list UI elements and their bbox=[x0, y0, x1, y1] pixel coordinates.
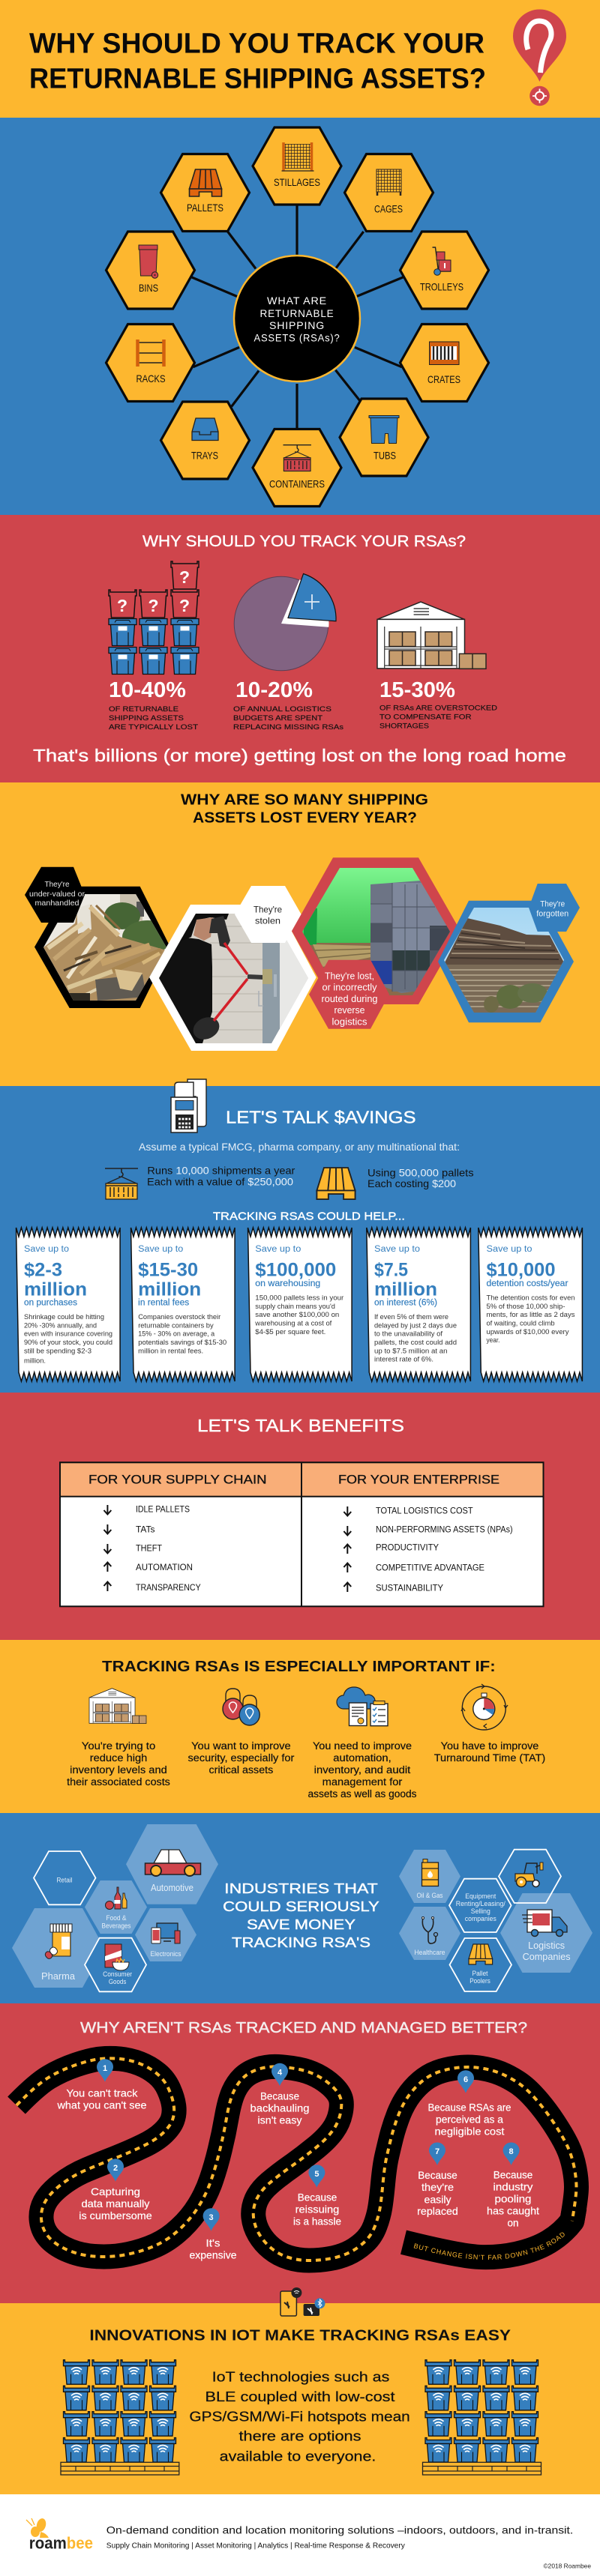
hex: consumer goods: Consumer bbox=[103, 1970, 132, 1979]
tag: stolen: stolen bbox=[255, 916, 280, 926]
card: purchases: 90% of your stock, you could bbox=[24, 1339, 112, 1347]
tag: forgotten: They're bbox=[540, 899, 565, 908]
reason 4: 4 bbox=[278, 2069, 283, 2078]
icon: phone and beacon bbox=[280, 2287, 326, 2316]
hex: equipment rental bbox=[449, 1879, 512, 1932]
card: purchases: 20% -30% annually, and bbox=[24, 1321, 97, 1330]
hub circle: ASSETS (RSAs)? bbox=[254, 333, 340, 343]
reason 6: negligible cost bbox=[435, 2126, 505, 2138]
enterprise list bbox=[376, 1506, 513, 1593]
hex: racks: RACKS bbox=[136, 372, 165, 384]
panel: why aren't RSAs tracked bbox=[0, 2003, 600, 2303]
text: inventory: You're trying to bbox=[82, 1740, 155, 1752]
icon: stacked bins with missing ones: ? bbox=[117, 596, 128, 615]
hex: crates: CRATES bbox=[428, 373, 460, 385]
stat: 10-40%: ARE TYPICALLY LOST bbox=[109, 723, 198, 732]
reason 3: expensive bbox=[189, 2248, 237, 2260]
card: rental fees: 15% - 30% on average, a bbox=[138, 1330, 215, 1339]
table bbox=[60, 1462, 543, 1606]
hex: logistics companies: Companies bbox=[523, 1951, 571, 1962]
text: automation: automation, bbox=[333, 1752, 392, 1764]
text: security: security, especially for bbox=[188, 1752, 295, 1764]
tag: stolen bbox=[235, 886, 302, 943]
center text bbox=[223, 1880, 380, 1950]
enterprise list: TOTAL LOGISTICS COST bbox=[376, 1506, 473, 1515]
heading: LET'S TALK BENEFITS bbox=[197, 1416, 404, 1435]
card: detention costs: 5% of those 10,000 ship- bbox=[486, 1303, 566, 1311]
icon: pallet of connected bins, right bbox=[423, 2360, 542, 2475]
supply chain list: TATs bbox=[136, 1526, 155, 1535]
stat: 10-40% bbox=[109, 678, 198, 732]
heading: WHY ARE SO MANY SHIPPING bbox=[181, 791, 428, 808]
hex: trays bbox=[160, 402, 249, 479]
header band bbox=[0, 0, 600, 118]
hub circle: RETURNABLE bbox=[260, 308, 334, 319]
card: detention costs: Save up to bbox=[486, 1245, 532, 1254]
stat: 10-20%: 10-20% bbox=[236, 678, 313, 702]
hex: pallets: PALLETS bbox=[187, 202, 224, 214]
card: warehousing: $4-$5 per square feet. bbox=[255, 1328, 326, 1336]
reason 7: easily bbox=[424, 2193, 452, 2205]
hex: food and beverages: Beverages bbox=[102, 1922, 131, 1931]
stat: 10-20% bbox=[233, 678, 344, 732]
tag: under-valued bbox=[25, 867, 86, 923]
pie chart bbox=[234, 574, 336, 671]
reason 2: Capturing bbox=[91, 2186, 140, 2198]
reason 8: has caught bbox=[487, 2205, 539, 2217]
card: interest: to the unavailability of bbox=[374, 1330, 442, 1339]
text: automation: inventory, and audit bbox=[314, 1764, 411, 1776]
supply chain arrows bbox=[104, 1505, 111, 1591]
tag: under-valued: under-valued or bbox=[29, 890, 86, 899]
takeaway line: That's billions (or more) getting lost on the long road home bbox=[33, 746, 566, 765]
photo hexagon: broken pallets bbox=[25, 867, 173, 1008]
title bbox=[29, 28, 486, 94]
hex: tubs bbox=[340, 399, 428, 476]
reason 5: reissuing bbox=[296, 2204, 339, 2215]
card: warehousing: save another $100,000 on bbox=[255, 1311, 339, 1319]
hex: healthcare: Healthcare bbox=[414, 1949, 446, 1957]
body text: GPS/GSM/Wi-Fi hotspots mean bbox=[189, 2409, 410, 2425]
card: rental fees: potentials savings of $15-30 bbox=[138, 1339, 226, 1347]
stat: 15-30%: OF RSAs ARE OVERSTOCKED bbox=[380, 705, 497, 712]
reason 3: It's bbox=[206, 2236, 220, 2248]
hex: equipment rental: Equipment bbox=[465, 1892, 496, 1900]
stat: 15-30%: SHORTAGES bbox=[380, 723, 429, 730]
icon: payment terminal bbox=[171, 1079, 206, 1132]
supply chain list: TRANSPARENCY bbox=[136, 1584, 201, 1593]
hex: equipment rental: Selling bbox=[471, 1907, 490, 1915]
reason 6: Because RSAs are bbox=[428, 2102, 512, 2114]
card: interest: on interest (6%) bbox=[374, 1299, 437, 1308]
title: WHY SHOULD YOU TRACK YOUR bbox=[29, 28, 484, 60]
reason 7 bbox=[417, 2142, 458, 2217]
text: automation: You need to improve bbox=[313, 1740, 412, 1752]
hex: trolleys bbox=[400, 232, 489, 309]
icon: stacked bins with missing ones: ? bbox=[179, 596, 190, 615]
card: rental fees: million bbox=[138, 1279, 201, 1300]
supply chain list bbox=[136, 1505, 201, 1593]
reason 4: isn't easy bbox=[258, 2114, 302, 2126]
reason 8: 8 bbox=[509, 2147, 514, 2156]
panel: why are assets lost bbox=[0, 782, 600, 1086]
hex: trolleys: TROLLEYS bbox=[420, 281, 464, 293]
icon: pallet bbox=[316, 1168, 356, 1199]
hex: pallet poolers bbox=[450, 1938, 512, 1991]
card: warehousing: supply chain means you'd bbox=[255, 1303, 335, 1311]
hex: pallets bbox=[160, 154, 249, 231]
stat: 10-20%: BUDGETS ARE SPENT bbox=[233, 714, 322, 723]
icon: warehouse bbox=[89, 1689, 146, 1723]
enterprise list: COMPETITIVE ADVANTAGE bbox=[376, 1563, 484, 1572]
hex: cages: CAGES bbox=[374, 203, 403, 215]
hex: trays: TRAYS bbox=[191, 450, 218, 462]
reason 5 bbox=[293, 2165, 341, 2227]
hub circle: WHAT ARE bbox=[267, 295, 327, 307]
card: rental fees bbox=[130, 1228, 235, 1381]
reason 4: Because bbox=[260, 2090, 299, 2102]
text: security bbox=[188, 1740, 295, 1776]
enterprise arrows bbox=[344, 1506, 351, 1592]
card: detention costs: year. bbox=[486, 1336, 500, 1345]
text: turnaround: Turnaround Time (TAT) bbox=[434, 1752, 545, 1764]
card: interest: pallets, the cost could add bbox=[374, 1339, 457, 1347]
hex: consumer goods bbox=[85, 1938, 146, 1991]
reason 7: 7 bbox=[435, 2147, 440, 2156]
supply chain list: IDLE PALLETS bbox=[136, 1505, 190, 1514]
hex: oil and gas: Oil & Gas bbox=[417, 1892, 443, 1900]
card: interest: $7.5 bbox=[374, 1260, 408, 1281]
hub circle bbox=[234, 256, 360, 381]
footer bbox=[0, 2494, 600, 2576]
icon: stopwatch bbox=[461, 1684, 508, 1730]
hex: equipment rental: Renting/Leasing/ bbox=[456, 1900, 506, 1907]
enterprise list: NON-PERFORMING ASSETS (NPAs) bbox=[376, 1526, 513, 1535]
heading: TRACKING RSAs IS ESPECIALLY IMPORTANT IF: bbox=[102, 1659, 496, 1675]
title: RETURNABLE SHIPPING ASSETS? bbox=[29, 63, 486, 94]
hex: tractor bbox=[499, 1850, 561, 1903]
text: turnaround bbox=[434, 1740, 545, 1764]
tag: lost or misrouted bbox=[309, 960, 389, 1029]
reason 8: pooling bbox=[495, 2193, 531, 2205]
card: purchases: even with insurance covering bbox=[24, 1330, 112, 1339]
tag: under-valued: They're bbox=[45, 880, 70, 889]
text: inventory bbox=[67, 1740, 170, 1788]
hex: bins bbox=[106, 232, 195, 309]
text: automation: management for bbox=[322, 1776, 403, 1788]
card: purchases: on purchases bbox=[24, 1299, 77, 1308]
icon: warehouse bbox=[377, 602, 486, 669]
reason 6: perceived as a bbox=[436, 2114, 503, 2126]
hex: pallet poolers: Pallet bbox=[472, 1970, 488, 1978]
reason 8 bbox=[487, 2142, 539, 2229]
assumption line: Assume a typical FMCG, pharma company, or any multinational that: bbox=[139, 1141, 460, 1153]
reason 3 bbox=[189, 2208, 237, 2260]
assumption: shipments bbox=[147, 1165, 296, 1187]
stat: 10-20%: REPLACING MISSING RSAs bbox=[233, 723, 344, 732]
logo: roambee: roambee bbox=[29, 2534, 93, 2553]
hex: containers bbox=[253, 429, 341, 507]
card: interest: If even 5% of them were bbox=[374, 1313, 448, 1321]
assumption: shipments: Runs 10,000 shipments a year bbox=[147, 1165, 296, 1177]
card: purchases bbox=[16, 1228, 120, 1381]
hex: retail: Retail bbox=[57, 1877, 72, 1884]
card: rental fees: Companies overstock their bbox=[138, 1313, 220, 1321]
card: detention costs: ments, for as little as 2 days bbox=[486, 1311, 575, 1319]
reason 2: is cumbersome bbox=[79, 2209, 152, 2221]
reason 2: data manually bbox=[81, 2198, 150, 2209]
photo hexagon: theft with bolt cutters bbox=[149, 886, 316, 1051]
card: purchases: Shrinkage could be hitting bbox=[24, 1313, 104, 1321]
card: warehousing: on warehousing bbox=[255, 1279, 320, 1288]
card: interest: delayed by just 2 days due bbox=[374, 1321, 457, 1330]
photo hexagon: stacked crates bbox=[292, 857, 460, 1029]
assumption: pallets: Each costing $200 bbox=[368, 1177, 456, 1189]
stat: 10-20%: OF ANNUAL LOGISTICS bbox=[233, 705, 332, 714]
reason 1: 1 bbox=[103, 2064, 107, 2073]
reason 6 bbox=[428, 2070, 512, 2138]
tag: lost or misrouted: They're lost, bbox=[325, 971, 374, 982]
hex: electronics: Electronics bbox=[150, 1950, 182, 1958]
hex: food and beverages bbox=[85, 1880, 147, 1934]
reason 3: 3 bbox=[209, 2213, 214, 2222]
card: warehousing: 150,000 pallets less in your bbox=[255, 1294, 344, 1303]
panel: let's talk savings bbox=[0, 1079, 600, 1393]
panel: innovations in IoT bbox=[0, 2287, 600, 2494]
hex: consumer goods: Goods bbox=[109, 1978, 127, 1986]
card: detention costs: The detention costs for even bbox=[486, 1294, 574, 1303]
hex: stillages: STILLAGES bbox=[274, 176, 320, 188]
stat: 15-30%: 15-30% bbox=[380, 678, 455, 702]
text: inventory: their associated costs bbox=[67, 1776, 170, 1788]
tag: lost or misrouted: logistics bbox=[332, 1016, 368, 1027]
card: warehousing: $100,000 bbox=[255, 1260, 336, 1281]
photo hexagon: forgotten pallets bbox=[438, 884, 580, 1022]
panel: let's talk benefits bbox=[0, 1393, 600, 1640]
heading bbox=[181, 791, 428, 827]
icon: stacked bins with missing ones: ? bbox=[148, 596, 159, 615]
card: detention costs: upwards of $10,000 every bbox=[486, 1328, 569, 1336]
reason 1: You can't track bbox=[66, 2087, 139, 2099]
stat: 15-30% bbox=[380, 678, 497, 730]
assumption: shipments: Each with a value of $250,000 bbox=[147, 1175, 293, 1187]
card: interest bbox=[367, 1228, 470, 1381]
body text: BLE coupled with low-cost bbox=[206, 2389, 394, 2404]
card: detention costs bbox=[478, 1228, 582, 1381]
card: interest: up to $7.5 million at an bbox=[374, 1347, 447, 1355]
card: interest: Save up to bbox=[374, 1245, 420, 1254]
reason 5: is a hassle bbox=[293, 2215, 341, 2227]
heading: LET'S TALK $AVINGS bbox=[226, 1108, 416, 1127]
heading: ASSETS LOST EVERY YEAR? bbox=[193, 810, 417, 827]
stat: 10-40%: SHIPPING ASSETS bbox=[109, 714, 184, 723]
card: warehousing: warehousing at a cost of bbox=[254, 1319, 332, 1328]
hex: bins: BINS bbox=[139, 282, 158, 294]
card: rental fees: $15-30 bbox=[138, 1260, 198, 1281]
enterprise list: SUSTAINABILITY bbox=[376, 1584, 443, 1593]
tag: forgotten bbox=[529, 884, 580, 932]
card: rental fees: in rental fees bbox=[138, 1299, 189, 1308]
card: rental fees: million in rental fees. bbox=[138, 1347, 203, 1355]
text: inventory: inventory levels and bbox=[70, 1764, 167, 1776]
panel: why should you track bbox=[0, 515, 600, 782]
text: automation bbox=[308, 1740, 417, 1800]
text: automation: assets as well as goods bbox=[308, 1788, 417, 1800]
reason 4 bbox=[250, 2063, 309, 2126]
reason 2: 2 bbox=[113, 2164, 118, 2173]
road caption: BUT CHANGE ISN'T FAR DOWN THE ROAD bbox=[414, 2232, 565, 2260]
column header: supply chain: FOR YOUR SUPPLY CHAIN bbox=[88, 1473, 267, 1486]
hex: pharma bbox=[12, 1908, 104, 1988]
reason 6: 6 bbox=[464, 2075, 468, 2084]
hex: pallet poolers: Poolers bbox=[470, 1977, 490, 1985]
copyright: ©2018 Roambee bbox=[543, 2563, 591, 2570]
winding road bbox=[16, 2058, 576, 2260]
hex: containers: CONTAINERS bbox=[269, 478, 325, 490]
services line: Supply Chain Monitoring | Asset Monitoring | Analytics | Real-time Response & Recovery bbox=[106, 2542, 405, 2550]
subheading: TRACKING RSAS COULD HELP... bbox=[213, 1210, 405, 1222]
card: interest: million bbox=[374, 1279, 437, 1300]
icon: stacked bins with missing ones bbox=[109, 561, 199, 675]
body text: there are options bbox=[238, 2428, 362, 2444]
reason 5: 5 bbox=[314, 2170, 319, 2179]
panel: especially important if bbox=[0, 1640, 600, 1813]
tag: lost or misrouted: routed during bbox=[321, 994, 378, 1004]
hex: equipment rental: companies bbox=[465, 1915, 496, 1922]
text: security: critical assets bbox=[209, 1764, 274, 1776]
card: purchases: million bbox=[24, 1279, 87, 1300]
card: purchases: Save up to bbox=[24, 1245, 69, 1254]
card: purchases: million. bbox=[24, 1357, 46, 1366]
panel: what are returnable shipping assets bbox=[0, 118, 600, 515]
heading: INNOVATIONS IN IOT MAKE TRACKING RSAs EASY bbox=[89, 2328, 512, 2344]
center text: COULD SERIOUSLY bbox=[223, 1898, 380, 1914]
stat: 15-30%: TO COMPENSATE FOR bbox=[380, 714, 472, 721]
icon: cloud with documents bbox=[337, 1687, 388, 1726]
reason 1 bbox=[56, 2059, 147, 2111]
hex: cages bbox=[345, 154, 434, 231]
hex: automotive bbox=[126, 1824, 218, 1904]
icon: stacked bins with missing ones: ? bbox=[179, 567, 190, 587]
card: warehousing bbox=[248, 1228, 352, 1381]
icon: location pin with question mark bbox=[513, 9, 566, 106]
card: detention costs: $10,000 bbox=[486, 1260, 555, 1281]
icon: pallet of connected bins, left bbox=[61, 2360, 179, 2475]
card: purchases: still be spending $2-3 bbox=[24, 1347, 92, 1355]
tag: forgotten: forgotten bbox=[536, 910, 568, 919]
reason 7: Because bbox=[418, 2169, 458, 2181]
stat: 10-40%: OF RETURNABLE bbox=[109, 705, 178, 714]
body text bbox=[189, 2368, 410, 2464]
hex: electronics bbox=[135, 1908, 196, 1961]
icon: location padlocks bbox=[223, 1689, 260, 1725]
card: rental fees: Save up to bbox=[138, 1245, 183, 1254]
heading: WHY SHOULD YOU TRACK YOUR RSAs? bbox=[142, 533, 466, 550]
body text: available to everyone. bbox=[220, 2448, 376, 2464]
hex: logistics companies: Logistics bbox=[528, 1940, 566, 1951]
reason 1: what you can't see bbox=[56, 2099, 147, 2111]
center text: TRACKING RSA'S bbox=[232, 1934, 370, 1950]
reason 5: Because bbox=[298, 2192, 337, 2204]
stat: 10-40%: 10-40% bbox=[109, 678, 186, 702]
enterprise list: PRODUCTIVITY bbox=[376, 1544, 439, 1553]
reason 7: replaced bbox=[417, 2205, 458, 2217]
logo: roambee bbox=[26, 2518, 93, 2553]
supply chain list: THEFT bbox=[136, 1544, 162, 1553]
hex: tubs: TUBS bbox=[374, 450, 396, 462]
reason 8: on bbox=[507, 2217, 519, 2229]
tagline: On-demand condition and location monitoring solutions –indoors, outdoors, and in-transit. bbox=[106, 2524, 573, 2536]
hex: stillages bbox=[253, 127, 341, 205]
panel: industries bbox=[0, 1813, 600, 2003]
card: detention costs: detention costs/year bbox=[486, 1279, 568, 1288]
icon: shipping container bbox=[105, 1168, 138, 1199]
hex: crates bbox=[400, 324, 489, 402]
text: security: You want to improve bbox=[191, 1740, 291, 1752]
card: interest: interest rate of 6%. bbox=[374, 1356, 434, 1364]
card: warehousing: Save up to bbox=[255, 1245, 301, 1254]
hex: automotive: Automotive bbox=[151, 1883, 194, 1893]
hex: retail bbox=[34, 1851, 96, 1904]
center text: INDUSTRIES THAT bbox=[224, 1880, 378, 1896]
reason 8: industry bbox=[494, 2180, 532, 2192]
tag: stolen: They're bbox=[254, 904, 282, 914]
reason 4: backhauling bbox=[250, 2102, 309, 2114]
card: rental fees: returnable containers by bbox=[138, 1321, 214, 1330]
column header: enterprise: FOR YOUR ENTERPRISE bbox=[338, 1473, 500, 1486]
hex: oil and gas bbox=[399, 1850, 460, 1903]
heading: WHY AREN'T RSAs TRACKED AND MANAGED BETTER? bbox=[80, 2020, 527, 2036]
card: detention costs: of waiting, could climb bbox=[486, 1319, 555, 1328]
hub circle: SHIPPING bbox=[269, 320, 325, 331]
card: purchases: $2-3 bbox=[24, 1260, 62, 1281]
reason 2 bbox=[79, 2159, 152, 2221]
hex: food and beverages: Food & bbox=[106, 1914, 127, 1922]
hex: logistics companies bbox=[500, 1893, 592, 1973]
reason 7: they're bbox=[422, 2181, 454, 2193]
tag: under-valued: manhandled bbox=[34, 899, 80, 908]
tag: lost or misrouted: reverse bbox=[334, 1005, 365, 1016]
supply chain list: AUTOMATION bbox=[136, 1563, 193, 1572]
hex: pharma: Pharma bbox=[41, 1970, 76, 1982]
text: turnaround: You have to improve bbox=[441, 1740, 538, 1752]
body text: IoT technologies such as bbox=[212, 2368, 389, 2384]
center text: SAVE MONEY bbox=[247, 1916, 356, 1932]
tag: lost or misrouted: or incorrectly bbox=[322, 982, 377, 992]
assumption: pallets: Using 500,000 pallets bbox=[368, 1166, 474, 1178]
text: inventory: reduce high bbox=[90, 1752, 147, 1764]
assumption: pallets bbox=[368, 1166, 474, 1189]
hex: healthcare bbox=[399, 1907, 460, 1960]
hex: racks bbox=[106, 324, 195, 402]
reason 8: Because bbox=[494, 2168, 532, 2180]
